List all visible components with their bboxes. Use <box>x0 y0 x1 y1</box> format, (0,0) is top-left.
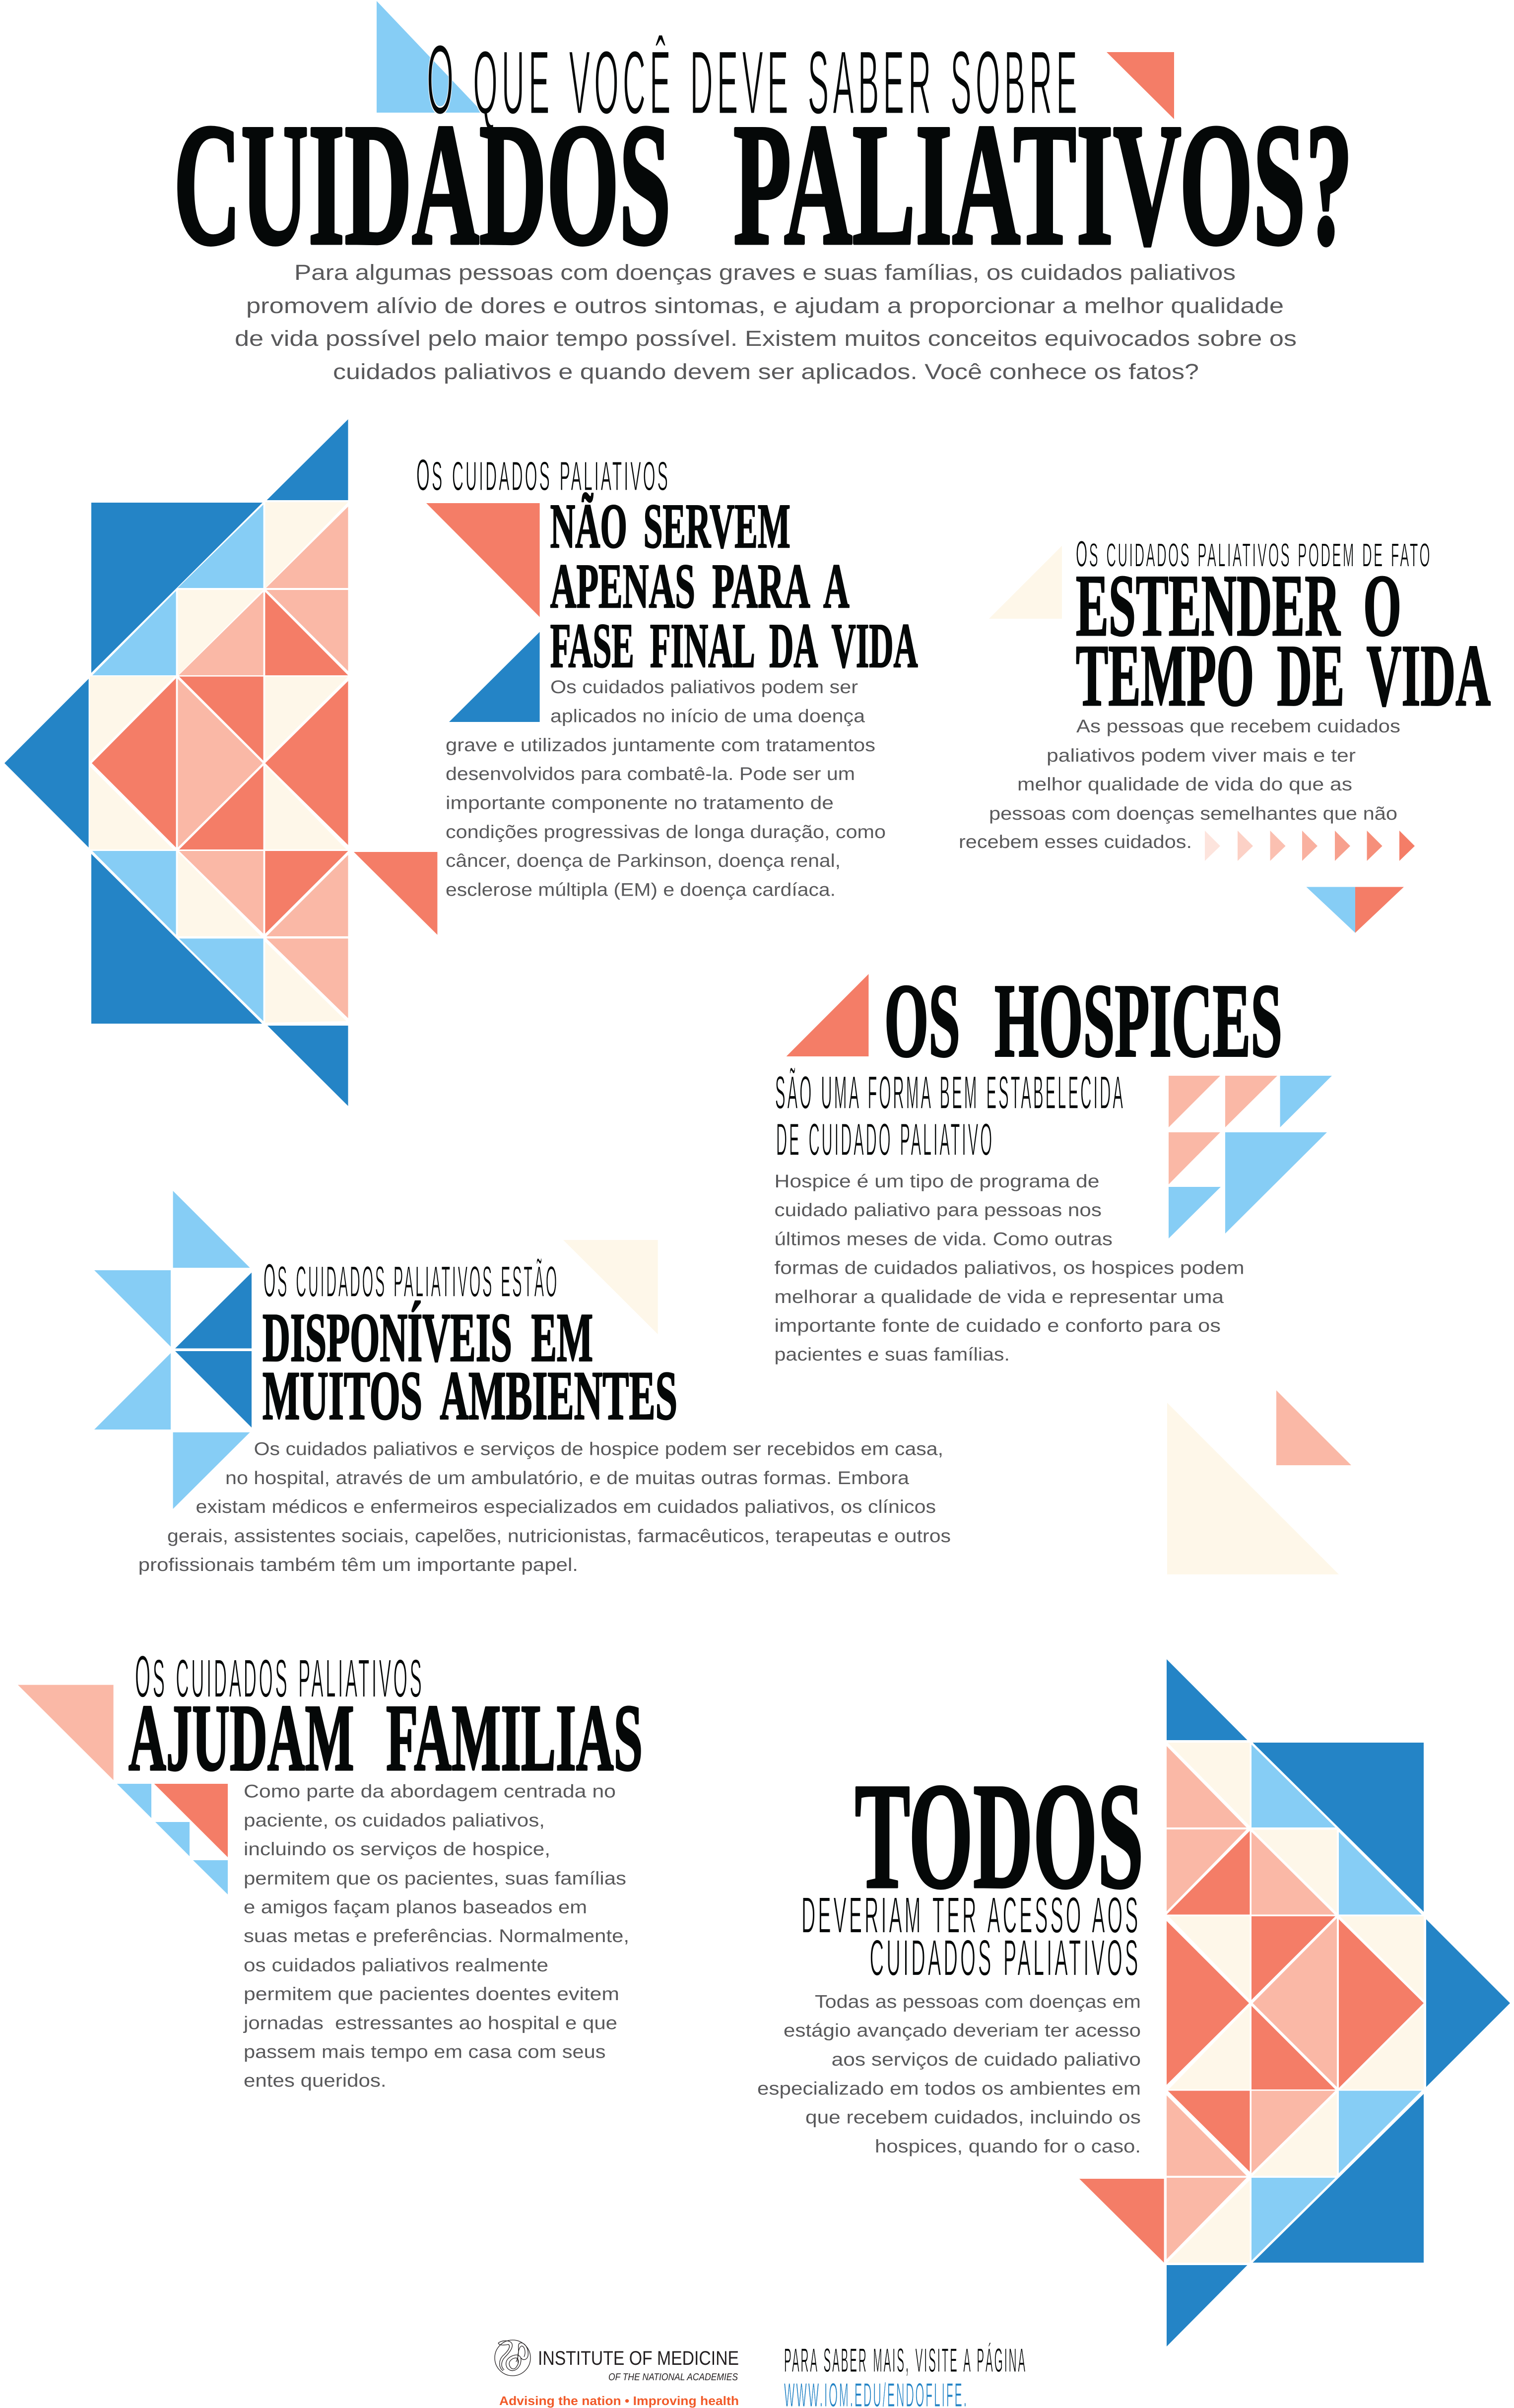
panel: footer <box>495 2340 1027 2408</box>
title: CUIDADOS <box>174 88 671 281</box>
body text: cuidado paliativo para pessoas nos <box>774 1200 1102 1220</box>
body text: permitem que os pacientes, suas famílias <box>244 1868 626 1888</box>
body text: no hospital, através de um ambulatório, e de muitas outras formas. Embora <box>225 1468 909 1488</box>
subheading: DE CUIDADO PALIATIVO <box>776 1114 994 1165</box>
intro text: promovem alívio de dores e outros sintomas, e ajudam a proporcionar a melhor qualidade <box>246 294 1284 318</box>
icon: salmon triangle <box>787 974 868 1056</box>
body text: desenvolvidos para combatê-la. Pode ser um <box>446 764 855 784</box>
body text <box>243 1781 629 2091</box>
panel: ajudam famílias: OS CUIDADOS PALIATIVOS <box>135 1643 424 1710</box>
body text <box>757 1992 1141 2156</box>
body text: e amigos façam planos baseados em <box>244 1897 587 1917</box>
body text: melhor qualidade de vida do que as <box>1017 774 1352 794</box>
body text: paliativos podem viver mais e ter <box>1047 745 1356 766</box>
panel: estender o tempo de vida <box>959 533 1491 933</box>
body text: jornadas estressantes ao hospital e que <box>243 2013 617 2033</box>
heading: DISPONÍVEIS EM <box>263 1299 593 1376</box>
icon: cream triangle <box>563 1240 658 1334</box>
icon: right triangle mosaic <box>1079 1659 1510 2346</box>
icon: blue star of triangles <box>94 1191 252 1509</box>
icon: institute of medicine logo <box>495 2340 530 2376</box>
body text: especializado em todos os ambientes em <box>757 2079 1141 2099</box>
body text: passem mais tempo em casa com seus <box>244 2041 605 2062</box>
panel: os hospices <box>774 962 1351 1574</box>
heading: APENAS PARA A <box>550 551 850 621</box>
body text: permitem que pacientes doentes evitem <box>244 1984 619 2004</box>
heading: MUITOS AMBIENTES <box>263 1358 677 1434</box>
icon: left triangle mosaic <box>4 419 437 1106</box>
heading: FASE FINAL DA VIDA <box>550 610 918 681</box>
icon: salmon triangle <box>426 503 540 617</box>
body text: importante fonte de cuidado e conforto para os <box>774 1315 1221 1336</box>
icon: light salmon triangle <box>1276 1390 1351 1465</box>
panel: ajudam famílias <box>18 1643 643 2091</box>
body text: paciente, os cuidados paliativos, <box>244 1810 545 1830</box>
intro text: Para algumas pessoas com doenças graves e suas famílias, os cuidados paliativos <box>294 260 1236 285</box>
panel: disponíveis em muitos ambientes <box>94 1191 951 1575</box>
logo wordmark: INSTITUTE OF MEDICINE <box>538 2347 739 2369</box>
body text: Os cuidados paliativos e serviços de hospice podem ser recebidos em casa, <box>254 1439 943 1459</box>
body text: últimos meses de vida. Como outras <box>774 1229 1113 1249</box>
tagline: Advising the nation • Improving health <box>499 2394 739 2408</box>
heading: AJUDAM FAMILIAS <box>129 1685 643 1791</box>
subheading <box>801 1887 1140 1986</box>
body text: pacientes e suas famílias. <box>774 1344 1010 1365</box>
intro text: de vida possível pelo maior tempo possível. Existem muitos conceitos equivocados sobre os <box>235 326 1297 351</box>
icon: row of fading arrows <box>1205 831 1415 861</box>
body text: os cuidados paliativos realmente <box>244 1955 548 1975</box>
body text: incluindo os serviços de hospice, <box>244 1839 550 1859</box>
body text: Como parte da abordagem centrada no <box>244 1781 616 1802</box>
body text: recebem esses cuidados. <box>959 832 1192 852</box>
body text: profissionais também têm um importante papel. <box>138 1555 578 1575</box>
body text: melhorar a qualidade de vida e representar uma <box>774 1287 1224 1307</box>
body text: entes queridos. <box>244 2071 387 2091</box>
body text: pessoas com doenças semelhantes que não <box>989 803 1397 824</box>
icon: triangle cluster <box>1169 1076 1332 1238</box>
body text: formas de cuidados paliativos, os hospices podem <box>774 1257 1245 1278</box>
body text <box>774 1171 1245 1365</box>
heading: NÃO SERVEM <box>550 491 790 561</box>
body text: grave e utilizados juntamente com tratamentos <box>446 735 875 755</box>
icon: light blue triangle <box>377 1 483 113</box>
body text: gerais, assistentes sociais, capelões, nutricionistas, farmacêuticos, terapeutas e outros <box>167 1526 951 1546</box>
body text: Todas as pessoas com doenças em <box>815 1992 1141 2012</box>
panel: não servem apenas para a fase final da vida <box>416 451 918 900</box>
body text: esclerose múltipla (EM) e doença cardíaca. <box>446 879 836 900</box>
heading: TODOS <box>855 1752 1144 1920</box>
body text: aplicados no início de uma doença <box>550 706 865 726</box>
heading <box>263 1299 677 1434</box>
heading <box>550 491 918 681</box>
body text: estágio avançado deveriam ter acesso <box>784 2020 1141 2040</box>
body text <box>446 677 886 900</box>
body text: existam médicos e enfermeiros especializados em cuidados paliativos, os clínicos <box>196 1497 936 1517</box>
icon: blue triangle <box>449 632 540 722</box>
icon: cream triangle <box>989 546 1062 619</box>
body text: Hospice é um tipo de programa de <box>774 1171 1100 1191</box>
panel: header <box>174 1 1353 384</box>
body text: aos serviços de cuidado paliativo <box>832 2049 1141 2070</box>
intro text <box>235 260 1297 384</box>
logo sub-line: OF THE NATIONAL ACADEMIES <box>608 2372 738 2383</box>
panel: disponíveis em muitos ambientes: OS CUIDADOS PALIATIVOS ESTÃO <box>263 1254 559 1307</box>
icon: triangle cluster <box>18 1685 228 1894</box>
body text <box>959 716 1400 852</box>
subheading <box>775 1066 1125 1165</box>
body text: que recebem cuidados, incluindo os <box>805 2107 1141 2128</box>
panel: todos <box>757 1752 1144 2156</box>
icon: cream triangle <box>1167 1403 1339 1574</box>
intro text: cuidados paliativos e quando devem ser aplicados. Você conhece os fatos? <box>333 360 1199 384</box>
icon: split down triangle <box>1306 887 1404 933</box>
text: PARA SABER MAIS, VISITE A PÁGINA <box>784 2342 1027 2379</box>
icon: salmon triangle <box>1107 52 1174 119</box>
body text <box>138 1439 951 1575</box>
body text: importante componente no tratamento de <box>446 793 834 813</box>
body text: hospices, quando for o caso. <box>875 2136 1141 2156</box>
heading <box>1076 556 1491 724</box>
body text: condições progressivas de longa duração, como <box>446 822 886 842</box>
body text: As pessoas que recebem cuidados <box>1076 716 1400 736</box>
body text: Os cuidados paliativos podem ser <box>550 677 858 697</box>
body text: câncer, doença de Parkinson, doença renal, <box>446 850 841 871</box>
panel: não servem apenas para a fase final da vida: OS CUIDADOS PALIATIVOS <box>416 451 670 500</box>
body text: suas metas e preferências. Normalmente, <box>244 1926 629 1946</box>
